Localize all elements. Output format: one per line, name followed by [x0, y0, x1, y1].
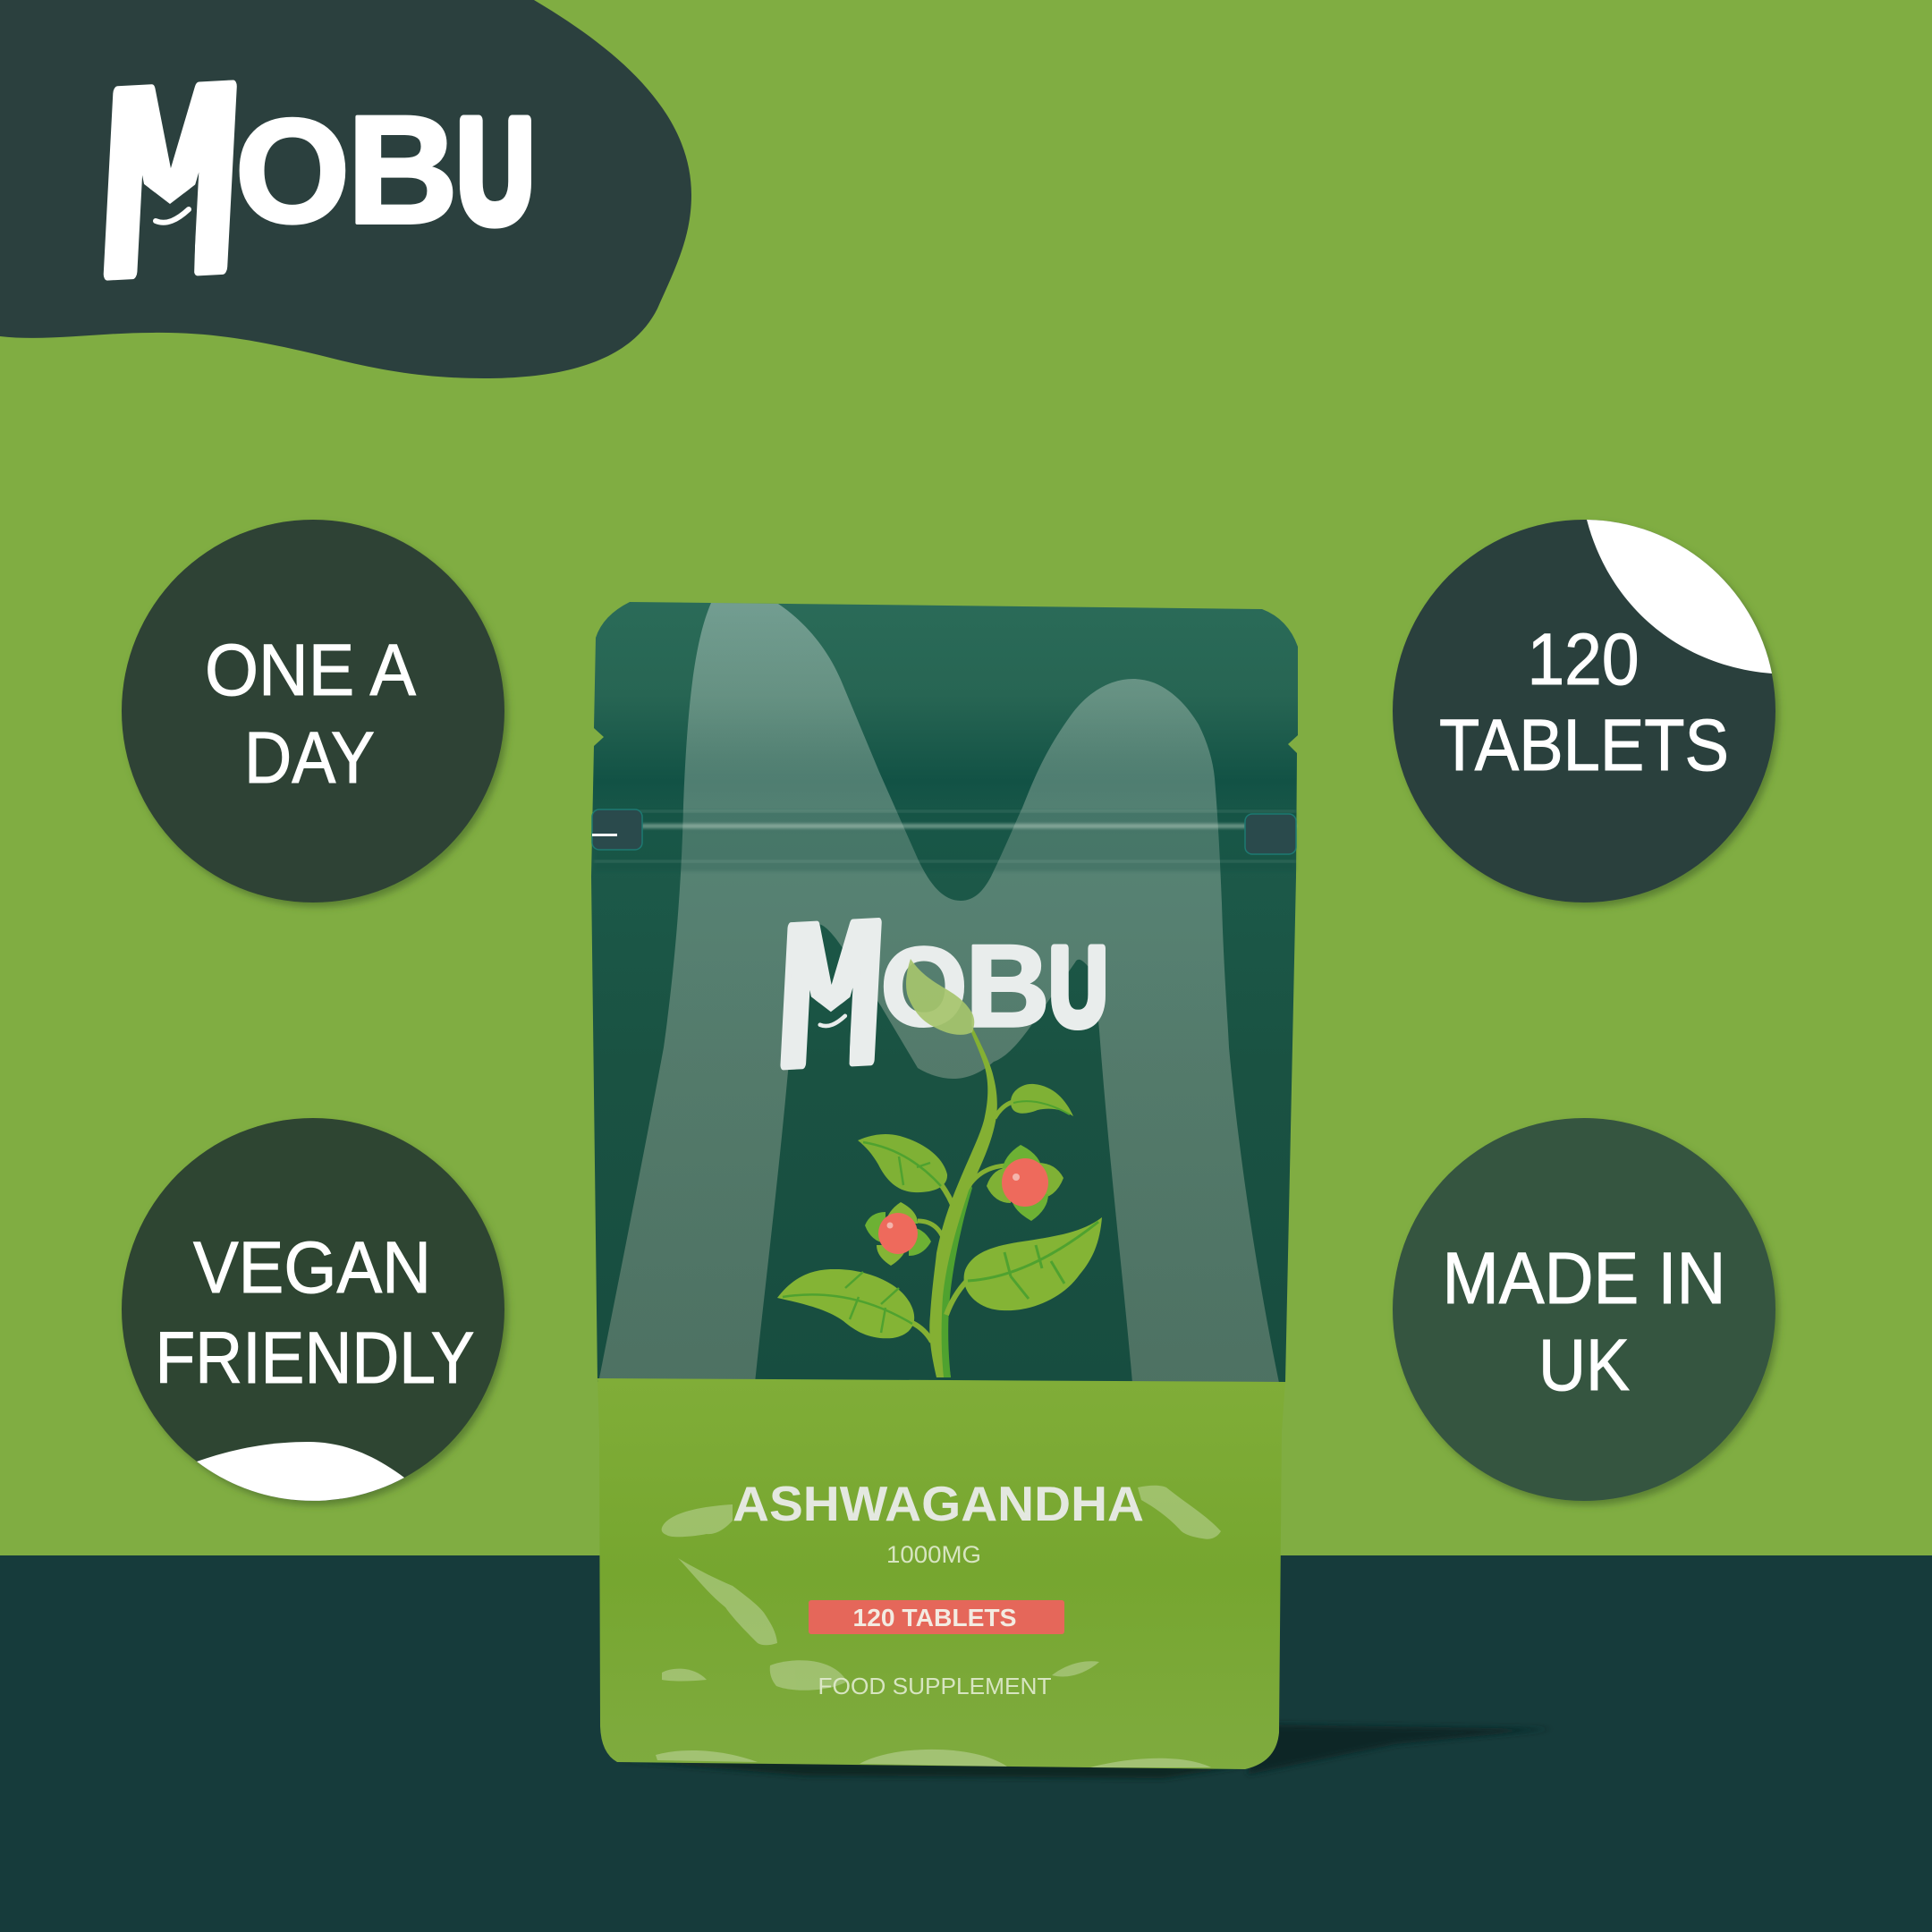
- badge: one a day: ONE A: [205, 630, 416, 711]
- product pouch: [591, 602, 1298, 1769]
- blob shape: [0, 0, 691, 378]
- large left leaf: [777, 1269, 932, 1342]
- small berry: [865, 1202, 946, 1266]
- brand logo: O: [235, 89, 350, 253]
- brand logo: U: [457, 89, 534, 254]
- logo blob: [0, 0, 691, 378]
- red tablet count label: 120 TABLETS: [853, 1604, 1016, 1631]
- floor shadow of pouch: [1248, 1724, 1552, 1775]
- badge: one a day: DAY: [244, 717, 375, 799]
- pouch logo: [780, 918, 1106, 1070]
- dark floor: [0, 1555, 1932, 1932]
- contact shadow under pouch: [617, 1760, 1245, 1778]
- zipper seal: [592, 809, 1296, 871]
- translucent lower shapes: [656, 1486, 1221, 1767]
- badge: vegan friendly: VEGAN: [193, 1227, 431, 1309]
- pouch upper body: [591, 602, 1298, 1382]
- top leaf over logo: [906, 959, 974, 1035]
- pouch lower band: [597, 1378, 1285, 1769]
- badge: vegan friendly: FRIENDLY: [156, 1318, 474, 1399]
- badge: 120 tablets: 120: [1528, 619, 1639, 700]
- brand logo: [104, 80, 531, 281]
- pouch logo: O: [880, 923, 968, 1049]
- badge: made in uk: MADE IN: [1442, 1238, 1726, 1319]
- ashwagandha plant illustration: [777, 959, 1102, 1377]
- translucent M band: [598, 603, 1279, 1383]
- brand logo: B: [347, 84, 458, 256]
- pouch logo: U: [1049, 925, 1107, 1050]
- upper right leaf: [995, 1084, 1073, 1118]
- food supplement note: FOOD SUPPLEMENT: [818, 1673, 1052, 1699]
- badge: 120 tablets: TABLETS: [1439, 705, 1729, 786]
- badge: made in uk: UK: [1538, 1325, 1630, 1406]
- product name: ASHWAGANDHA: [733, 1476, 1144, 1531]
- plant stem: [929, 1029, 997, 1377]
- mid left leaf: [858, 1134, 954, 1209]
- stem shade: [942, 1185, 972, 1377]
- large berry: [964, 1145, 1063, 1221]
- pouch logo: M: [771, 886, 890, 1110]
- brand logo: M: [91, 38, 249, 333]
- badge: one a day: [122, 520, 504, 902]
- badge: vegan friendly: [122, 1118, 504, 1501]
- large right leaf: [946, 1217, 1102, 1315]
- red tablet count label: [809, 1600, 1064, 1634]
- dosage: 1000MG: [886, 1541, 981, 1568]
- badge: 120 tablets: [1393, 520, 1775, 902]
- pouch logo: B: [965, 920, 1050, 1051]
- badge: made in uk: [1393, 1118, 1775, 1501]
